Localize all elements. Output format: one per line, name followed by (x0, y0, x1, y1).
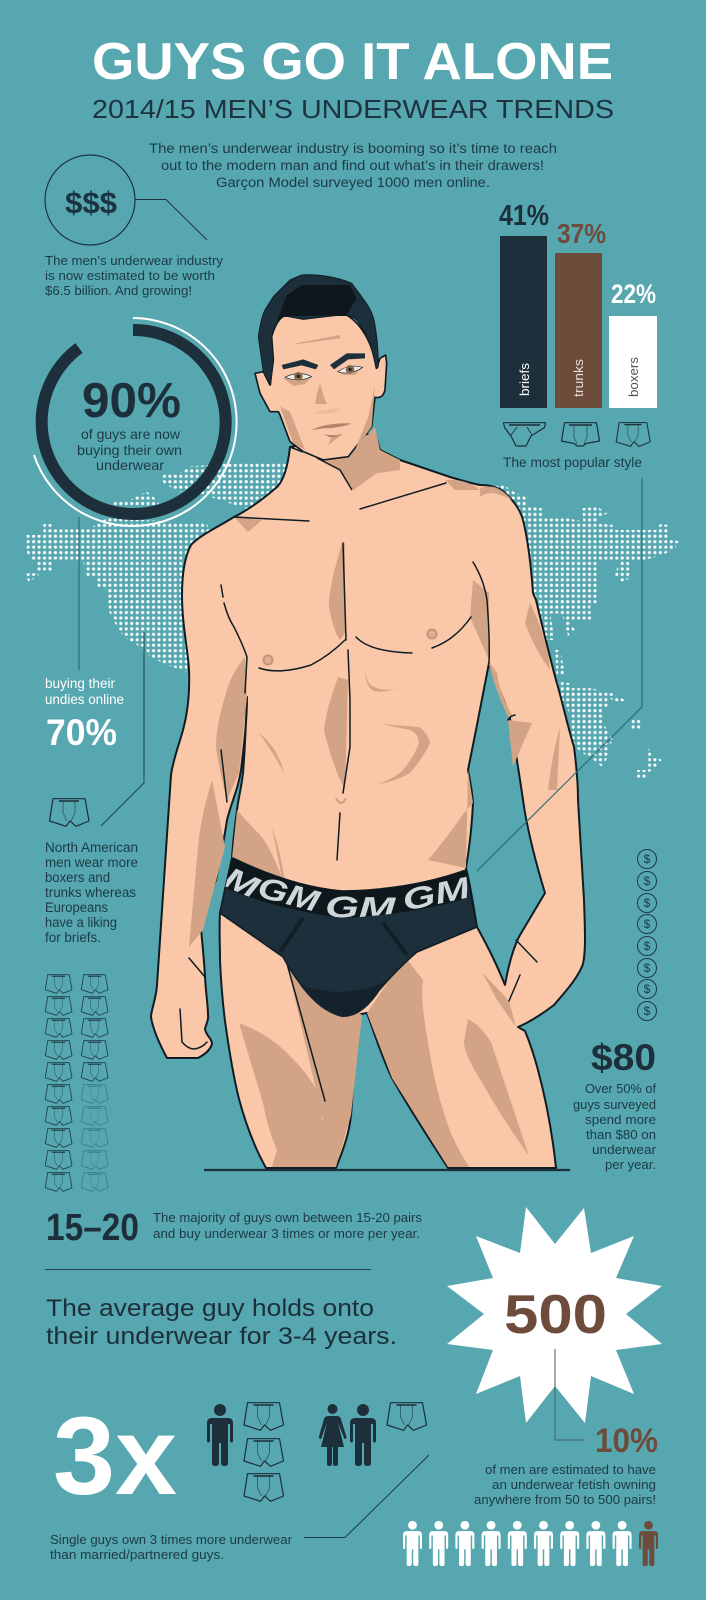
regional text: have a liking (45, 915, 117, 930)
three boxers icons (244, 1403, 284, 1501)
icon grid: pairs owned (45, 975, 108, 1191)
connector line: star to 10 percent (555, 1349, 585, 1440)
panel: popular style bar chart (499, 200, 657, 470)
intro text: out to the modern man and find out what’s in their drawers! (161, 158, 544, 173)
regional text: men wear more (45, 855, 138, 870)
bar: trunks (555, 218, 606, 408)
bar: boxers: 22% (611, 279, 656, 309)
spend text: than $80 on (586, 1127, 656, 1142)
spend text: Over 50% of (585, 1081, 656, 1096)
15-20 figure: 15–20 (46, 1207, 139, 1249)
industry text: The men’s underwear industry (45, 253, 224, 268)
bar: briefs: briefs (517, 362, 532, 396)
ring caption (77, 426, 182, 473)
dollar signs: $$$ (65, 185, 117, 220)
online text: buying their (45, 676, 116, 691)
body (151, 433, 585, 1168)
online text: undies online (45, 692, 124, 707)
pointer line (101, 632, 144, 826)
ring caption: buying their own (77, 442, 182, 458)
bar: briefs: 41% (499, 200, 549, 232)
waistband logo: GM (400, 871, 474, 918)
pairs text (153, 1211, 422, 1241)
panel: north america vs europe (45, 632, 144, 945)
regional text: boxers and (45, 870, 110, 885)
intro text (149, 141, 557, 190)
waistband (225, 858, 468, 918)
dollar coin column: $ (644, 896, 651, 910)
fetish text (474, 1462, 656, 1507)
fetish text: an underwear fetish owning (492, 1477, 656, 1492)
dollar coin column: $ (644, 939, 651, 953)
eyes (285, 365, 363, 381)
connector line (135, 200, 207, 240)
couple icon (319, 1404, 376, 1466)
bar: boxers: boxers (626, 357, 641, 397)
industry text: is now estimated to be worth (45, 268, 215, 283)
single boxers icon (387, 1403, 426, 1430)
dollar coin column: $ (644, 961, 651, 975)
panel: 3x single guys (50, 1395, 429, 1562)
panel: 15-20 pairs (46, 1207, 422, 1249)
single guys text: than married/partnered guys. (50, 1547, 224, 1562)
panel: 80 dollar spend (573, 1037, 657, 1172)
spend text (573, 1081, 657, 1172)
regional text: for briefs. (45, 930, 101, 945)
starburst: 500 (447, 1207, 662, 1423)
3x figure: 3x (53, 1395, 177, 1518)
dollar coin column: $ (644, 982, 651, 996)
pairs text: The majority of guys own between 15-20 pairs (153, 1211, 422, 1225)
bar: briefs (499, 200, 549, 408)
single man icon (207, 1404, 233, 1466)
panel: 10 percent (403, 1422, 658, 1566)
online text (45, 676, 124, 707)
skin shading (189, 480, 560, 1167)
pairs text: and buy underwear 3 times or more per year. (153, 1227, 420, 1241)
ring caption: underwear (96, 457, 164, 473)
navel (336, 798, 346, 803)
chart caption: The most popular style (503, 455, 642, 470)
bar: trunks: trunks (571, 358, 586, 397)
10 percent figure: 10% (595, 1422, 658, 1460)
panel: industry value (45, 155, 224, 298)
briefs (219, 858, 477, 1017)
fetish text: anywhere from 50 to 500 pairs! (474, 1492, 656, 1507)
single guys text (50, 1532, 293, 1562)
regional text: trunks whereas (45, 885, 136, 900)
heading: average guy (46, 1295, 397, 1350)
waistband logo: GM (325, 891, 397, 925)
waistband logo: GM (254, 871, 324, 919)
spend text: per year. (605, 1157, 656, 1172)
divider (45, 1268, 371, 1270)
subtitle: 2014/15 MEN’S UNDERWEAR TRENDS (92, 94, 614, 124)
heading: average guy: their underwear for 3-4 years. (46, 1323, 397, 1350)
intro text: The men’s underwear industry is booming so it’s time to reach (149, 141, 557, 156)
panel: 90 percent ring (34, 318, 237, 526)
500 figure: 500 (504, 1283, 607, 1345)
heading: average guy: The average guy holds onto (46, 1295, 374, 1322)
white ring (34, 318, 237, 526)
industry text: $6.5 billion. And growing! (45, 283, 192, 298)
face shading (280, 335, 375, 450)
waistband logo: M (219, 861, 265, 906)
90 percent figure: 90% (82, 374, 181, 428)
intro text: Garçon Model surveyed 1000 men online. (216, 175, 490, 190)
80 dollar figure: $80 (591, 1037, 656, 1078)
industry text (45, 253, 224, 298)
neck shading (317, 427, 400, 490)
regional text: Europeans (45, 900, 108, 915)
people row (403, 1521, 658, 1566)
dollar coin column (638, 850, 656, 1020)
star shape (447, 1207, 662, 1423)
body contour lines (180, 483, 537, 1101)
nipples (264, 630, 436, 664)
title: GUYS GO IT ALONE (92, 33, 613, 91)
head (255, 275, 400, 490)
style icons (504, 423, 650, 446)
dollar circle (45, 155, 135, 245)
regional text (45, 840, 138, 945)
bar: trunks: 37% (557, 218, 606, 249)
neck contour line (290, 447, 352, 490)
single guys text: Single guys own 3 times more underwear (50, 1532, 293, 1547)
pointer line: popular style to briefs (477, 478, 642, 871)
floor line (204, 1169, 570, 1171)
bar: boxers (609, 279, 657, 408)
regional text: North American (45, 840, 138, 855)
connector line (304, 1455, 429, 1538)
spend text: spend more (585, 1112, 656, 1127)
dollar coin column: $ (644, 874, 651, 888)
ring caption: of guys are now (81, 426, 181, 442)
connector line (78, 517, 80, 670)
spend text: underwear (592, 1142, 657, 1157)
eyebrows (282, 353, 365, 369)
dollar coin column: $ (644, 1004, 651, 1018)
hair (258, 275, 378, 385)
lips (311, 423, 352, 437)
face (255, 315, 387, 460)
dollar coin column: $ (644, 917, 651, 931)
fetish text: of men are estimated to have (485, 1462, 656, 1477)
spend text: guys surveyed (573, 1097, 656, 1112)
dollar coin column: $ (644, 852, 651, 866)
dark ring (42, 330, 226, 514)
world map dots (26, 464, 678, 778)
70 percent figure: 70% (46, 712, 117, 753)
waistband logo (225, 868, 468, 918)
boxer icon (50, 799, 89, 826)
panel: buying online (45, 517, 124, 753)
illustrated man (151, 275, 585, 1168)
